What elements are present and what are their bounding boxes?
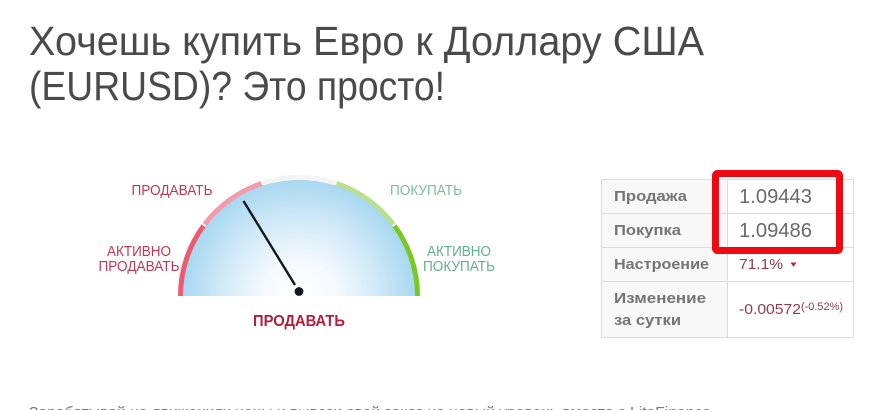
row: daily change: -0.00572 — [739, 301, 801, 318]
label column background — [602, 180, 728, 338]
arc: neutral — [263, 177, 335, 183]
arc: buy — [336, 184, 393, 224]
title: (EURUSD)? Это просто! — [29, 63, 445, 109]
arc: strong sell — [180, 226, 204, 296]
row: sell price: Продажа — [614, 188, 688, 205]
label: sell: ПРОДАВАТЬ — [132, 183, 212, 199]
row: sell price: 1.09443 — [739, 185, 812, 208]
title — [29, 18, 705, 109]
label: strong sell: АКТИВНО — [107, 244, 171, 260]
gauge dial — [182, 179, 416, 296]
label: strong buy: ПОКУПАТЬ — [423, 259, 495, 275]
gauge — [180, 177, 418, 296]
row: daily change: Изменение — [614, 290, 706, 307]
label: strong buy — [423, 244, 495, 275]
row: sentiment: Настроение — [614, 256, 709, 273]
row: daily change — [614, 290, 843, 329]
arc: strong buy — [394, 226, 418, 296]
label: buy: ПОКУПАТЬ — [390, 183, 462, 199]
row: buy price: 1.09486 — [739, 219, 812, 242]
row: daily change: за сутки — [614, 312, 681, 329]
row: sell price — [614, 185, 812, 208]
row: sentiment — [614, 256, 796, 273]
row: sentiment: 71.1% — [739, 256, 783, 273]
table grid — [602, 180, 854, 338]
gauge needle — [244, 201, 295, 285]
needle hub — [295, 287, 303, 296]
arc: sell — [205, 184, 262, 224]
quote table — [602, 180, 854, 338]
red highlight box — [716, 174, 840, 250]
gauge verdict: ПРОДАВАТЬ — [253, 313, 345, 330]
row: buy price — [614, 219, 812, 242]
row: daily change: (-0.52%) — [801, 301, 843, 313]
row: buy price: Покупка — [614, 222, 682, 239]
label: strong buy: АКТИВНО — [427, 244, 491, 260]
label: strong sell — [98, 244, 180, 275]
label: strong sell: ПРОДАВАТЬ — [98, 259, 180, 275]
title: Хочешь купить Евро к Доллару США — [29, 18, 705, 64]
